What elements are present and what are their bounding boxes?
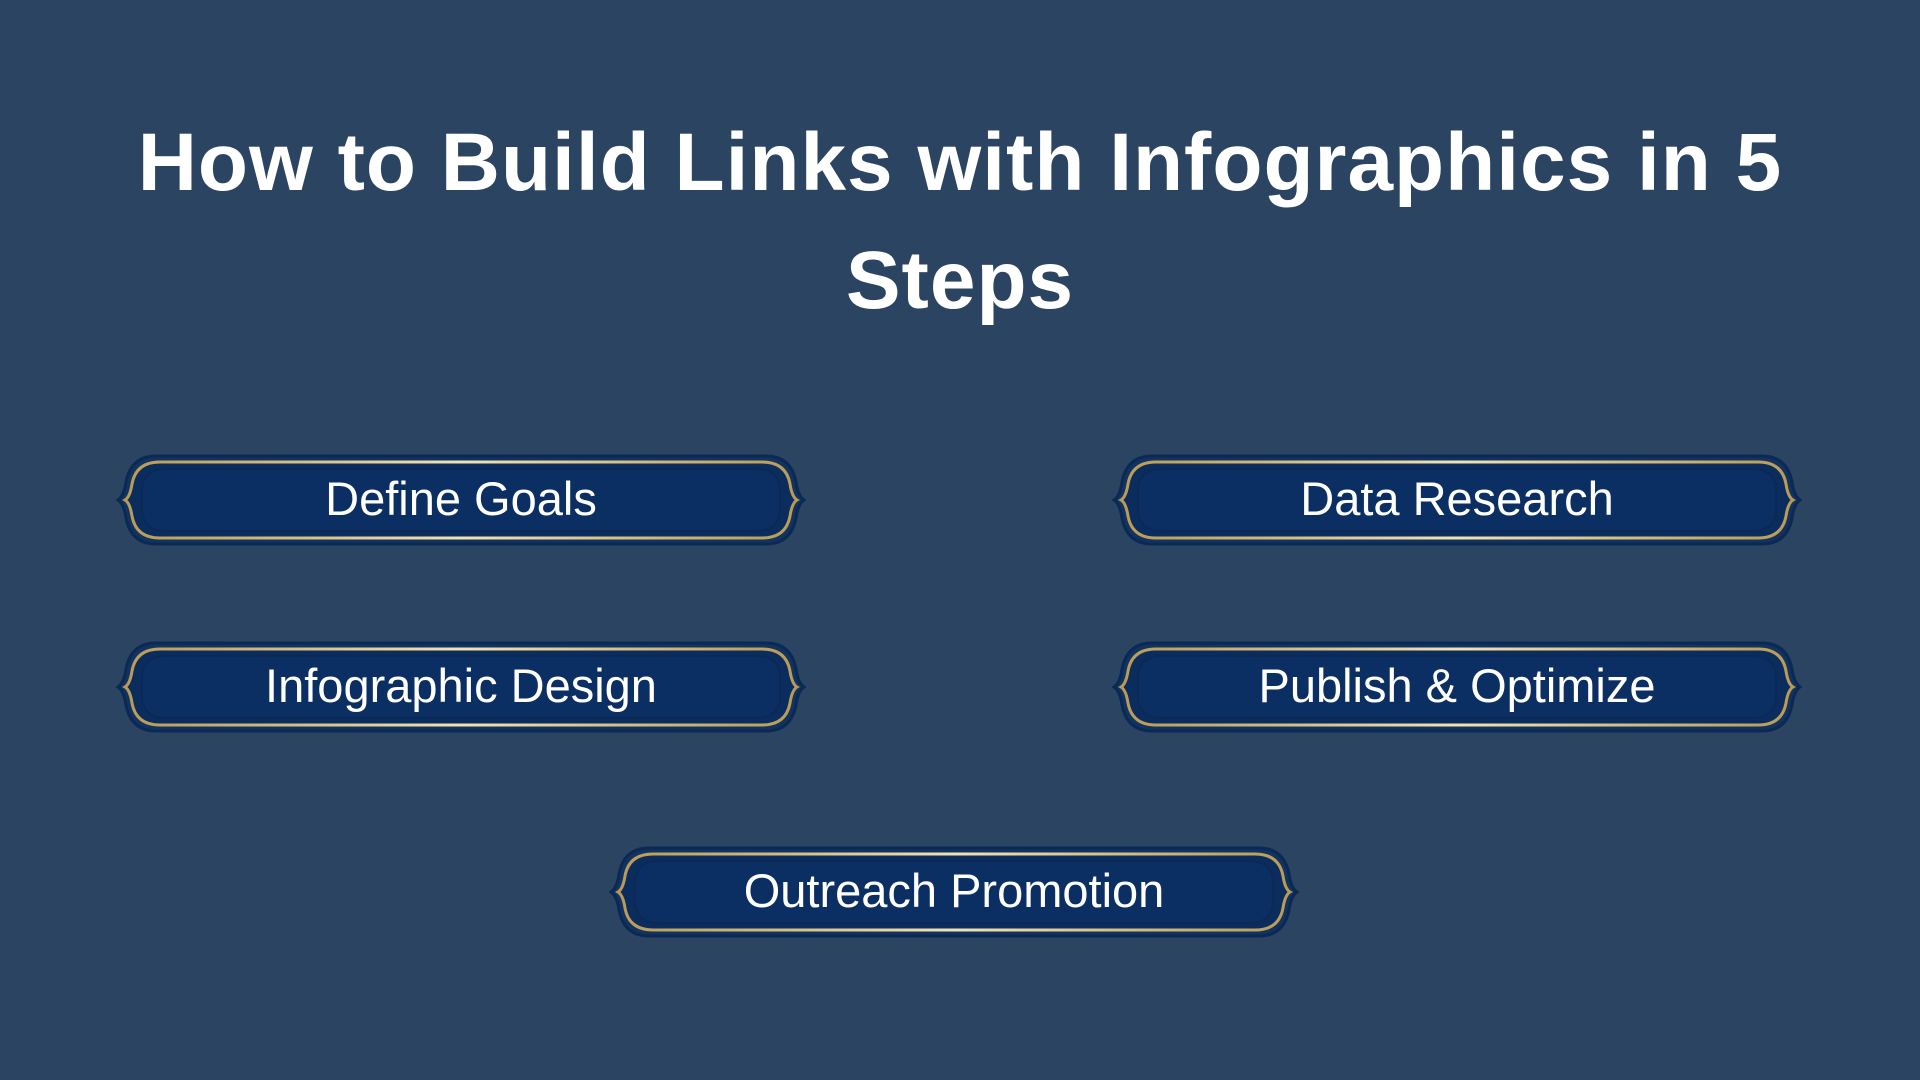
button: Outreach Promotion: Outreach Promotion (744, 864, 1164, 916)
button: Define Goals: Define Goals (325, 472, 597, 524)
title: Steps (846, 235, 1074, 326)
button: Infographic Design (116, 642, 806, 732)
button: Infographic Design: Infographic Design (265, 658, 657, 712)
button: Publish & Optimize (1112, 642, 1802, 732)
button: Publish & Optimize: Publish & Optimize (1258, 658, 1656, 712)
button: Outreach Promotion (609, 846, 1299, 938)
button: Data Research: Data Research (1300, 472, 1614, 524)
button: Data Research (1112, 454, 1802, 546)
title: How to Build Links with Infographics in 5 (138, 117, 1782, 208)
title (138, 117, 1782, 326)
button: Define Goals (116, 454, 806, 546)
